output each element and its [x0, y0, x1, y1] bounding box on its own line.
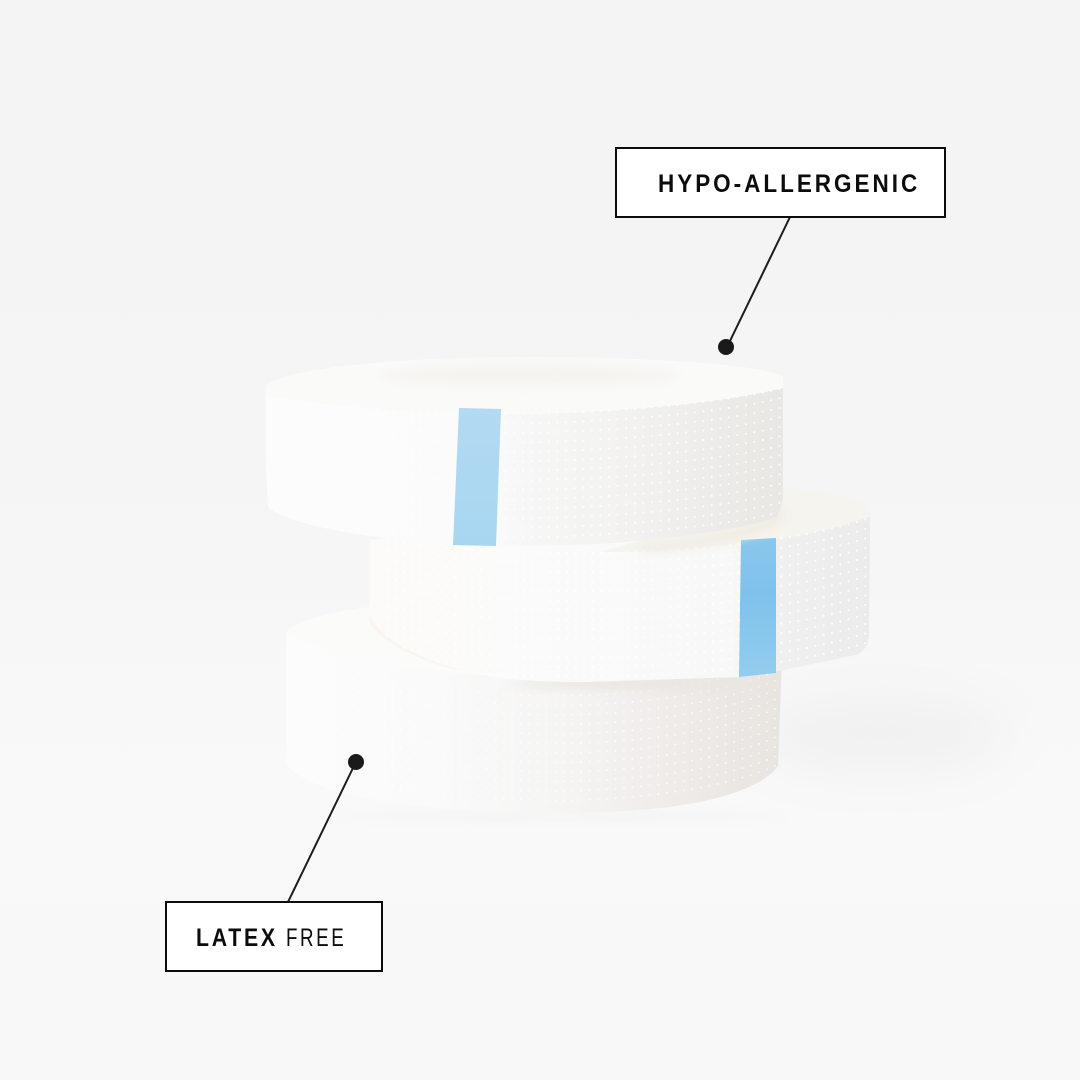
- tape roll: bottom: [590, 670, 782, 811]
- contact shadow under top roll: [644, 513, 781, 553]
- tape roll: top: [266, 388, 783, 546]
- label text: HYPO-ALLERGENIC: [658, 170, 917, 198]
- label text: FREE: [286, 923, 344, 952]
- roll top rim: [286, 607, 480, 676]
- soft floor shadows: [330, 699, 1010, 820]
- roll top face: [266, 357, 783, 414]
- perforated texture: [563, 674, 776, 801]
- roll core hole: [380, 363, 680, 387]
- roll top rim: [600, 488, 869, 552]
- roll underside shade: [370, 615, 468, 672]
- blue release strip: [739, 538, 776, 677]
- callout: hypo-allergenic: [616, 148, 945, 355]
- label text: LATEX: [196, 923, 276, 951]
- label box: [166, 902, 382, 971]
- perforated texture: [386, 518, 866, 663]
- label box: [616, 148, 945, 217]
- blue release strip: [453, 408, 501, 546]
- marker dot: [348, 754, 364, 770]
- contact shadow under middle roll: [510, 679, 810, 689]
- tape roll: middle: [370, 516, 870, 682]
- callout: latex free: [166, 754, 382, 971]
- marker dot: [718, 339, 734, 355]
- perforated texture: [557, 388, 780, 537]
